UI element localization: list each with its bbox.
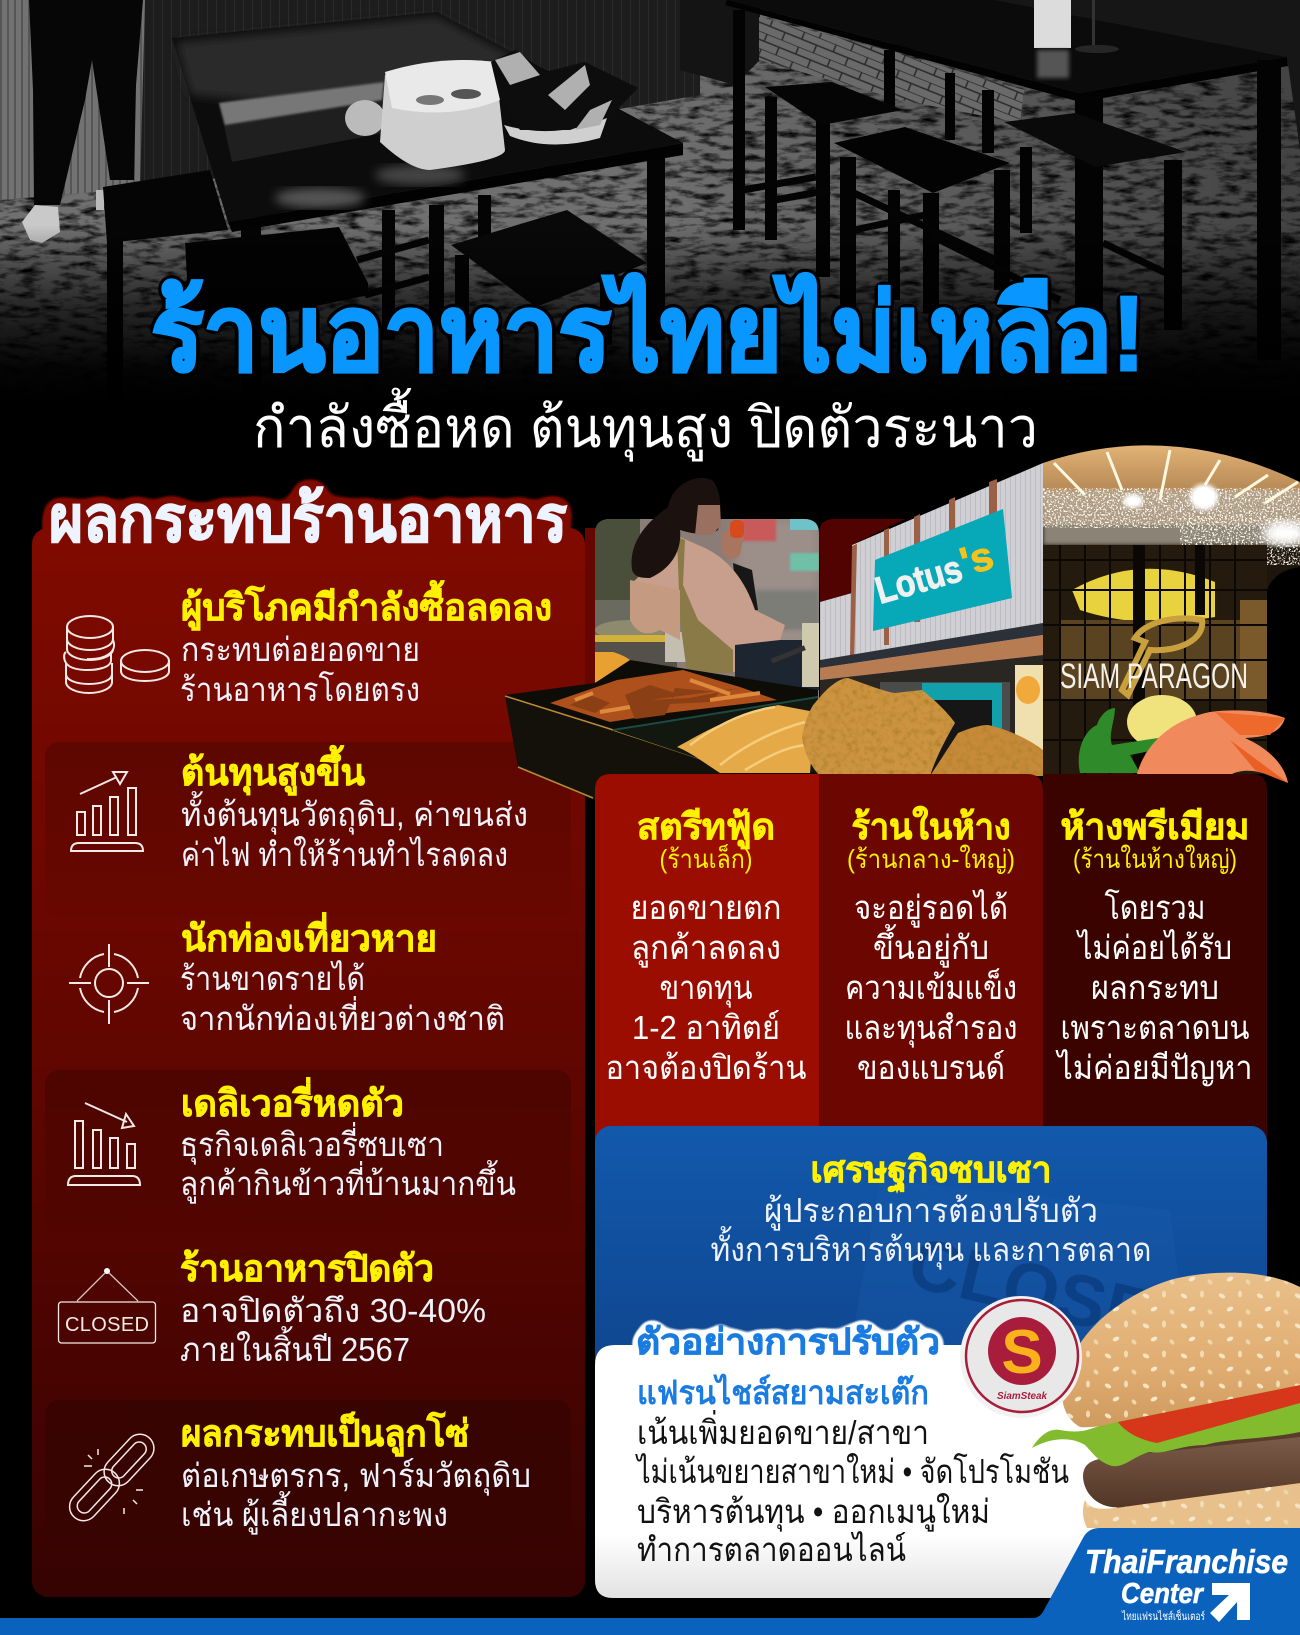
panel: street food column (595, 774, 819, 1140)
example list: เน้นเพิ่มยอดขาย/สาขา (637, 1410, 929, 1451)
item 4 text (180, 1077, 516, 1204)
panel: premium mall column (1043, 774, 1267, 1140)
wall (0, 0, 145, 200)
item 6 text: ผลกระทบเป็นลูกโซ่ (181, 1410, 469, 1457)
panel: premium mall column: เพราะตลาดบน (1060, 1009, 1250, 1046)
item 5 text: อาจปิดตัวถึง 30-40% (180, 1292, 486, 1329)
icon: rising bars (71, 772, 143, 851)
item 5 text (180, 1248, 486, 1368)
example list: ทำการตลาดออนไลน์ (637, 1531, 906, 1568)
table right (727, 0, 1287, 93)
lemon, herb and shrimp (1127, 695, 1197, 749)
panel: mall column: จะอยู่รอดได้ (854, 889, 1008, 928)
card: adaptation example (595, 1321, 1267, 1598)
example list (635, 1410, 1069, 1568)
item 1 text: ร้านอาหารโดยตรง (180, 671, 420, 708)
photo: Lotus's mall: Lotus (871, 548, 967, 613)
panel: premium mall column: ไม่ค่อยได้รับ (1075, 929, 1232, 966)
panel: mall column: (ร้านกลาง-ใหญ่) (847, 844, 1015, 874)
panel: mall column: ขึ้นอยู่กับ (873, 924, 989, 968)
title: ร้านอาหารไทยไม่เหลือ! (151, 273, 1145, 393)
panel: premium mall column: (ร้านในห้างใหญ่) (1073, 844, 1237, 874)
person legs (29, 0, 143, 205)
logo: Siam Steak: S (1001, 1318, 1043, 1387)
subtitle: กำลังซื้อหด ต้นทุนสูง ปิดตัวระนาว (253, 388, 1038, 462)
logo: ThaiFranchise Center (0, 1528, 1300, 1635)
bench (103, 170, 228, 243)
logo: ThaiFranchise Center: ไทยแฟรนไชส์เซ็นเตอร์ (1121, 1609, 1205, 1623)
panel: premium mall column: ห้างพรีเมียม (1060, 806, 1250, 847)
item 3 text: ร้านขาดรายได้ (180, 960, 365, 997)
item 2 text: ต้นทุนสูงขึ้น (181, 745, 365, 796)
description: ทั้งการบริหารต้นทุน และการตลาด (710, 1226, 1152, 1270)
item 1 text (180, 580, 552, 708)
store sign (873, 509, 1012, 631)
icon: broken chain (64, 1429, 160, 1526)
panel: street food column: ลูกค้าลดลง (631, 929, 781, 968)
panel: mall column: ของแบรนด์ (857, 1049, 1005, 1086)
icon: coins (64, 616, 169, 693)
heading: เศรษฐกิจซบเซา (810, 1149, 1052, 1193)
plate of leftovers (504, 118, 607, 145)
panel: street food column: 1-2 อาทิตย์ (632, 1009, 780, 1046)
icon: falling bars (68, 1103, 140, 1185)
item 1 text: กระทบต่อยอดขาย (181, 631, 420, 668)
item 3 text: นักท่องเที่ยวหาย (181, 912, 437, 959)
cook head and hair (632, 478, 720, 578)
stools and legs (733, 10, 1281, 360)
food trays (505, 660, 818, 800)
panel: restaurant impacts (32, 483, 597, 1597)
panel: premium mall column: ผลกระทบ (1091, 969, 1219, 1006)
panel: mall column (819, 774, 1043, 1140)
description (710, 1192, 1152, 1270)
icon: target (69, 944, 149, 1024)
item 2 text (181, 745, 528, 873)
item 3 text: จากนักท่องเที่ยวต่างชาติ (180, 996, 505, 1037)
photo: Lotus's mall: 's (955, 534, 998, 585)
under-table shapes (107, 150, 665, 415)
logo: ThaiFranchise Center: Center (1121, 1578, 1205, 1610)
photo: street food vendor (505, 478, 819, 800)
panel: street food column: อาจต้องปิดร้าน (606, 1049, 806, 1086)
table left (172, 12, 683, 222)
panel: street food column: ขาดทุน (660, 969, 752, 1008)
panel: economic slowdown (595, 1126, 1267, 1598)
icon: closed sign (58, 1268, 156, 1343)
item 4 text: ลูกค้ากินข้าวที่บ้านมากขึ้น (180, 1160, 516, 1204)
item 4 text: เดลิเวอรี่หดตัว (181, 1077, 404, 1124)
black strip right of card (1267, 1280, 1300, 1618)
item 6 text (181, 1410, 531, 1535)
foil tray (219, 82, 384, 162)
example list: บริหารต้นทุน • ออกเมนูใหม่ (637, 1493, 990, 1532)
franchise name: แฟรนไชส์สยามสะเต๊ก (637, 1373, 929, 1411)
item 4 text: ธุรกิจเดลิเวอรี่ซบเซา (180, 1122, 444, 1165)
burger (1032, 1273, 1300, 1528)
panel: mall column: ความเข้มแข็ง (845, 968, 1017, 1006)
icon: closed sign: CLOSED (65, 1314, 149, 1336)
tab heading: ตัวอย่างการปรับตัว (636, 1321, 940, 1362)
panel: mall column: ร้านในห้าง (852, 805, 1010, 847)
heading: ผลกระทบร้านอาหาร (49, 483, 567, 555)
styrofoam box (345, 100, 385, 136)
item 1 text: ผู้บริโภคมีกำลังซื้อลดลง (181, 580, 552, 631)
item 3 text (180, 912, 505, 1037)
item 6 text: เช่น ผู้เลี้ยงปลากะพง (181, 1491, 448, 1535)
panel: premium mall column: โดยรวม (1104, 889, 1206, 926)
panel: street food column: (ร้านเล็ก) (660, 843, 752, 874)
icon: arrow (1210, 1583, 1250, 1622)
item 5 text: ร้านอาหารปิดตัว (180, 1248, 434, 1289)
logo: Siam Steak: SiamSteak (997, 1391, 1047, 1402)
photo: Lotus's mall (802, 460, 1044, 780)
item 6 text: ต่อเกษตรกร, ฟาร์มวัตถุดิบ (181, 1457, 531, 1496)
example list: ไม่เน้นขยายสาขาใหม่ • จัดโปรโมชัน (635, 1453, 1069, 1490)
panel: economic slowdown: CLOSED (901, 1223, 1212, 1368)
item 5 text: ภายในสิ้นปี 2567 (180, 1326, 410, 1368)
panel: mall column: และทุนสำรอง (844, 1009, 1018, 1048)
description: ผู้ประกอบการต้องปรับตัว (764, 1192, 1098, 1231)
second cook (733, 563, 758, 612)
panel: street food column: สตรีทฟู้ด (637, 806, 775, 850)
panel: street food column: ยอดขายตก (630, 889, 782, 926)
panel: premium mall column: ไม่ค่อยมีปัญหา (1055, 1049, 1252, 1086)
item 2 text: ทั้งต้นทุนวัตถุดิบ, ค่าขนส่ง (181, 791, 528, 835)
item 2 text: ค่าไฟ ทำให้ร้านทำไรลดลง (181, 836, 508, 873)
photo: Siam Paragon (1043, 440, 1300, 790)
fried chicken (802, 678, 955, 776)
logo: Siam Steak (960, 1296, 1082, 1418)
cook blouse (630, 537, 785, 672)
